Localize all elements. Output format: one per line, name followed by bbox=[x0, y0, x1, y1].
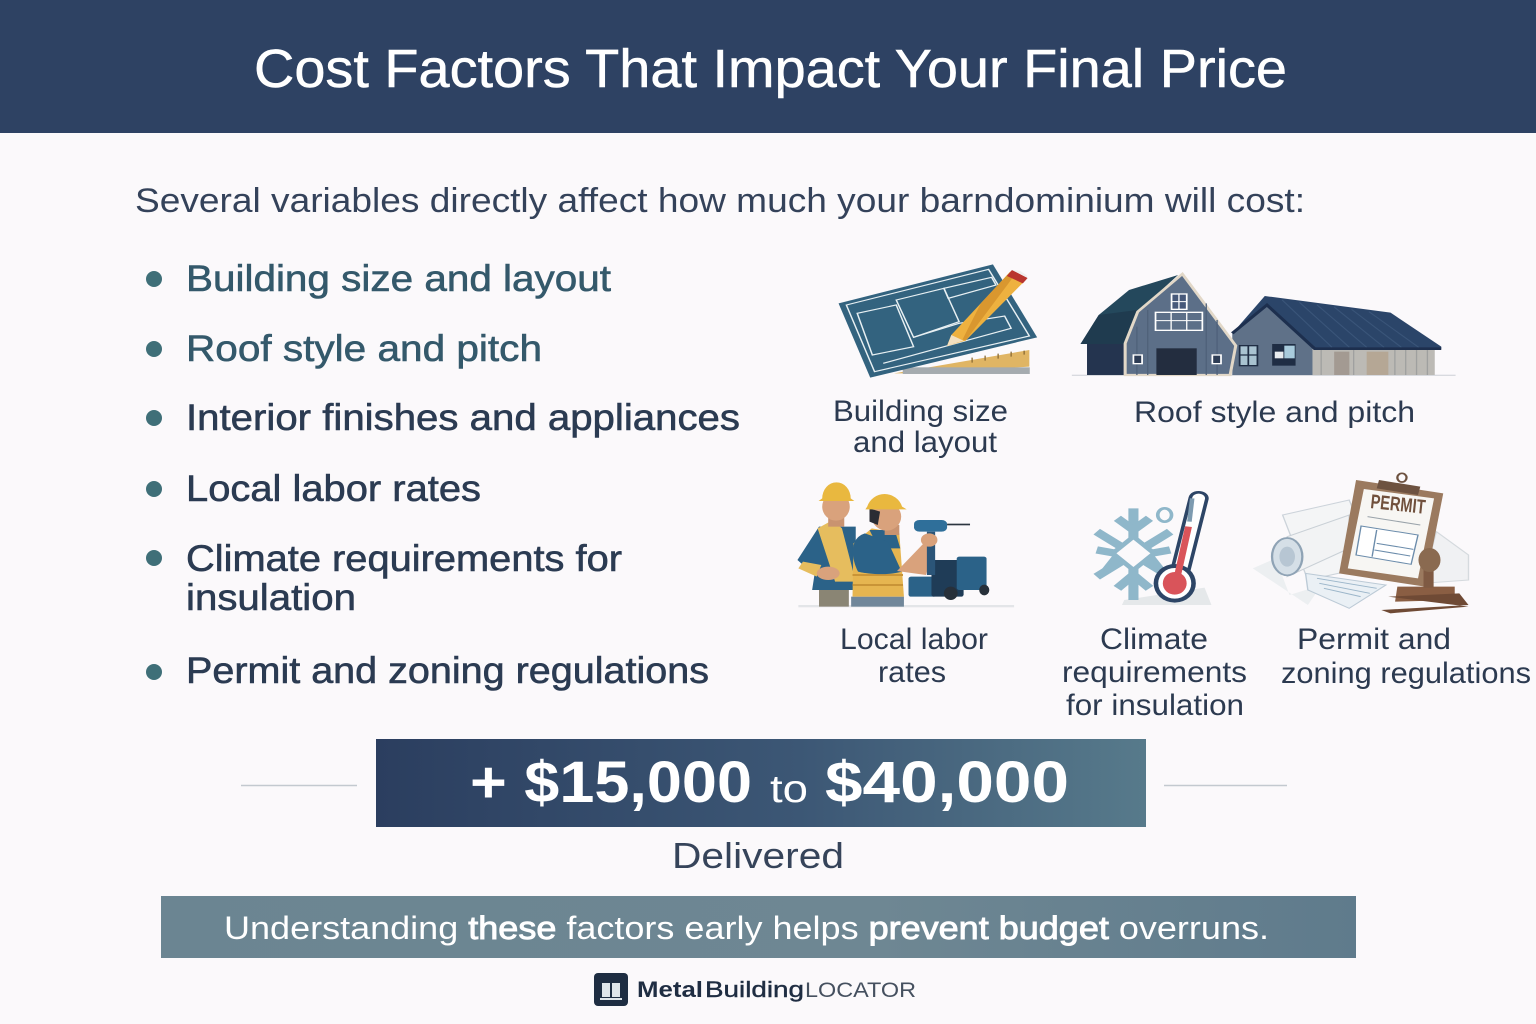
price text bbox=[470, 750, 1069, 815]
caption: roof style: Roof style and pitch bbox=[1134, 396, 1415, 429]
caption: building size bbox=[833, 395, 1008, 459]
price banner bbox=[376, 739, 1146, 827]
caption: permits bbox=[1281, 623, 1531, 690]
price text: + $15,000 bbox=[470, 750, 752, 815]
permit heading: PERMIT bbox=[1369, 491, 1426, 519]
takeaway bar bbox=[161, 896, 1356, 958]
price text: $40,000 bbox=[825, 750, 1069, 815]
caption: climate requirements: requirements bbox=[1062, 656, 1247, 689]
icon: workers with drill bbox=[797, 482, 1014, 607]
title: Cost Factors That Impact Your Final Price bbox=[254, 39, 1287, 99]
caption: building size: Building size bbox=[833, 395, 1008, 428]
icon: blueprint and pencil bbox=[839, 264, 1037, 378]
bullet: roof style: Roof style and pitch bbox=[186, 328, 542, 369]
intro text: Several variables directly affect how much your barndominium will cost: bbox=[135, 182, 1305, 220]
caption: labor rates: Local labor bbox=[840, 623, 988, 656]
bullet: climate requirements bbox=[146, 538, 622, 618]
icon: snowflake and thermometer bbox=[1097, 498, 1211, 605]
icon: permit clipboard and stamp bbox=[1253, 473, 1468, 613]
header banner bbox=[0, 0, 1536, 133]
logo wordmark: LOCATOR bbox=[805, 979, 916, 1002]
icon: barn and house bbox=[1072, 274, 1456, 376]
price text: to bbox=[770, 768, 808, 811]
caption: permits: Permit and bbox=[1297, 623, 1451, 656]
bullet: building size: Building size and layout bbox=[186, 258, 612, 299]
bullet: climate requirements: insulation bbox=[186, 577, 356, 618]
logo wordmark bbox=[637, 977, 916, 1002]
front worker bbox=[851, 597, 904, 607]
back worker bbox=[819, 590, 849, 607]
delivered label: Delivered bbox=[672, 835, 844, 876]
bullet: climate requirements: Climate requirements for bbox=[186, 538, 622, 579]
bullet: interior finishes: Interior finishes and appliances bbox=[186, 397, 740, 438]
caption: climate requirements bbox=[1062, 623, 1247, 722]
takeaway bar: Understanding these factors early helps prevent budget overruns. bbox=[224, 910, 1269, 946]
logo wordmark: Building bbox=[705, 977, 804, 1002]
logo icon bbox=[594, 973, 628, 1006]
bullet list bbox=[146, 258, 740, 691]
caption: climate requirements: for insulation bbox=[1066, 689, 1244, 722]
logo wordmark: Metal bbox=[637, 977, 703, 1002]
caption: permits: zoning regulations bbox=[1281, 657, 1531, 690]
caption: labor rates: rates bbox=[878, 656, 946, 689]
caption: climate requirements: Climate bbox=[1100, 623, 1208, 656]
caption: labor rates bbox=[840, 623, 988, 689]
caption: building size: and layout bbox=[853, 426, 998, 459]
bullet: labor rates: Local labor rates bbox=[186, 468, 481, 509]
bullet: permits: Permit and zoning regulations bbox=[186, 650, 709, 691]
logo bbox=[594, 973, 916, 1006]
